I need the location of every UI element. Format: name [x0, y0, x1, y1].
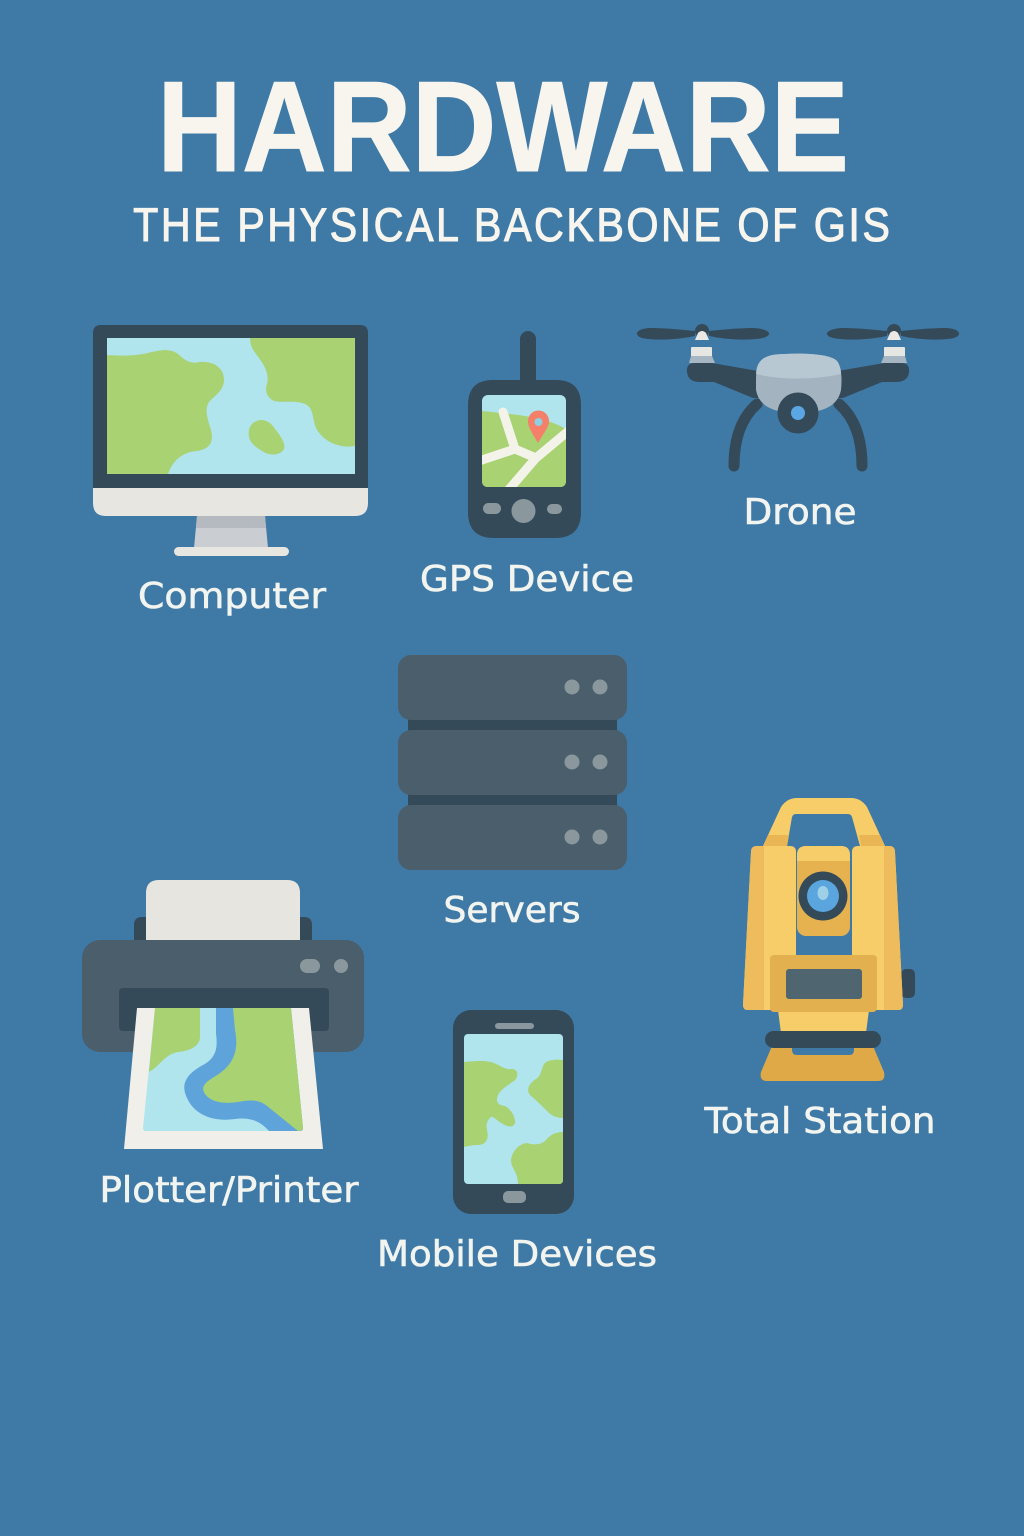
- label: computer: Computer: [138, 576, 326, 617]
- icon: plotter/printer: [82, 880, 364, 1149]
- icon: mobile device: [453, 1010, 574, 1214]
- icon: GPS device: [468, 331, 581, 538]
- icon: computer: [93, 325, 368, 556]
- title: HARDWARE: [157, 55, 849, 199]
- label: mobile devices: Mobile Devices: [377, 1234, 657, 1275]
- icon: drone: [637, 324, 959, 466]
- label: GPS device: GPS Device: [420, 559, 634, 600]
- label: plotter/printer: Plotter/Printer: [100, 1170, 359, 1211]
- left rotor and arm: [637, 324, 769, 466]
- label: drone: Drone: [744, 492, 856, 533]
- icon: servers: [398, 655, 627, 870]
- label: servers: Servers: [444, 890, 580, 931]
- label: total station: Total Station: [703, 1101, 936, 1142]
- icon: total station: [743, 798, 915, 1081]
- right rotor and arm: [827, 324, 959, 466]
- subtitle: THE PHYSICAL BACKBONE OF GIS: [133, 200, 890, 252]
